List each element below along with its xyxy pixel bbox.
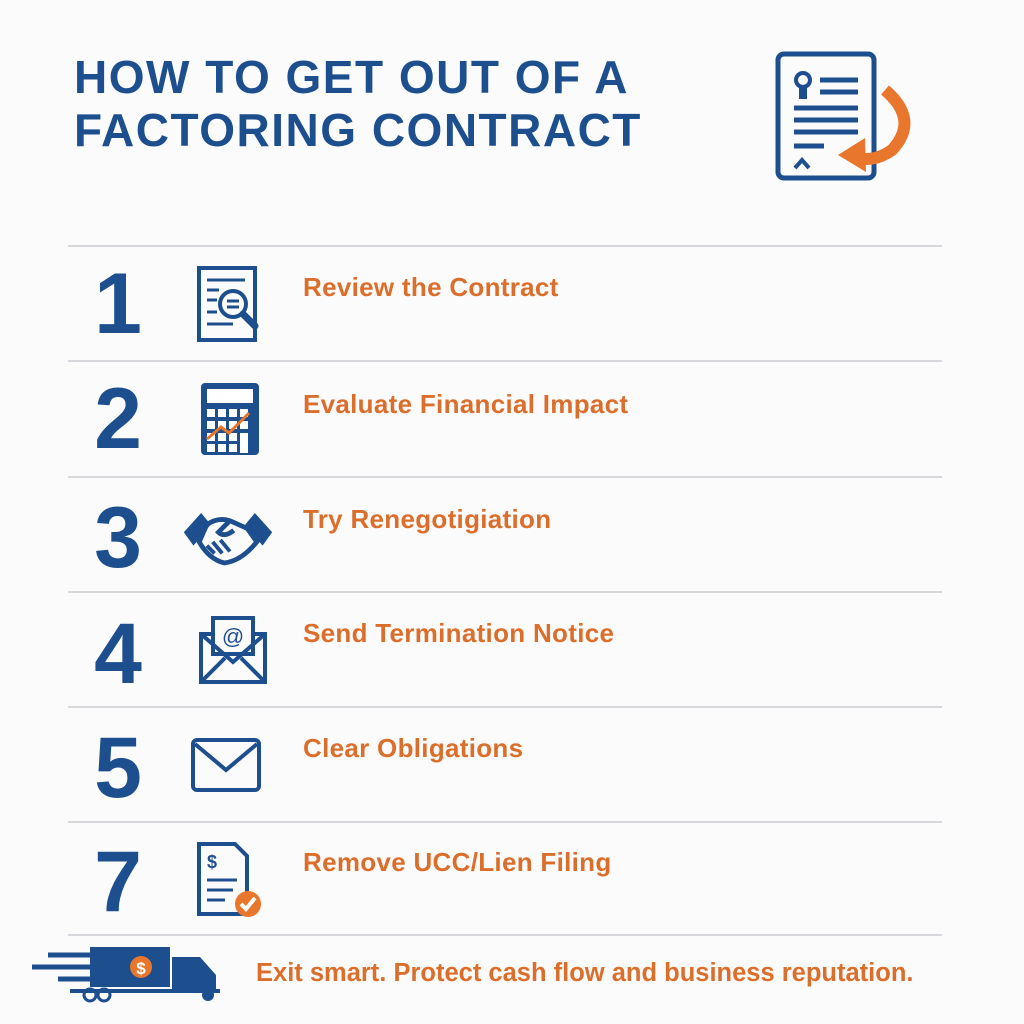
icon: delivery truck <box>32 947 220 1002</box>
step 5: Clear Obligations <box>303 733 523 763</box>
step 7 <box>94 834 612 930</box>
step 2 <box>94 371 628 467</box>
title: FACTORING CONTRACT <box>74 104 642 156</box>
step 3 <box>94 490 551 586</box>
title <box>74 51 642 156</box>
step 4: Send Termination Notice <box>303 618 614 648</box>
label: Review the Contract <box>303 272 559 302</box>
title: HOW TO GET OUT OF A <box>74 51 629 103</box>
icon: email envelope: @ <box>222 624 244 649</box>
icon: contract with arrow <box>776 52 910 180</box>
step 5 <box>94 720 523 816</box>
step 7: 7 <box>94 834 142 930</box>
step 5: 5 <box>94 720 142 816</box>
step 1 <box>94 256 559 352</box>
icon: calculator chart <box>201 383 259 455</box>
icon: envelope <box>191 738 261 792</box>
step 2: 2 <box>94 371 142 467</box>
icon: handshake <box>184 513 272 566</box>
icon: document magnifier <box>197 266 258 342</box>
step 4 <box>94 606 614 702</box>
step 7: Remove UCC/Lien Filing <box>303 847 612 877</box>
footer tagline: Exit smart. Protect cash flow and business reputation. <box>256 959 913 987</box>
step 1: 1 <box>94 256 142 352</box>
step 3: Try Renegotigiation <box>303 504 551 534</box>
step 3: 3 <box>94 490 142 586</box>
icon: document with check <box>197 842 261 917</box>
icon: delivery truck: $ <box>136 959 146 978</box>
icon: document with check: $ <box>207 852 217 872</box>
step 4: 4 <box>94 606 142 702</box>
icon: email envelope <box>199 616 267 684</box>
step 2: Evaluate Financial Impact <box>303 389 628 419</box>
